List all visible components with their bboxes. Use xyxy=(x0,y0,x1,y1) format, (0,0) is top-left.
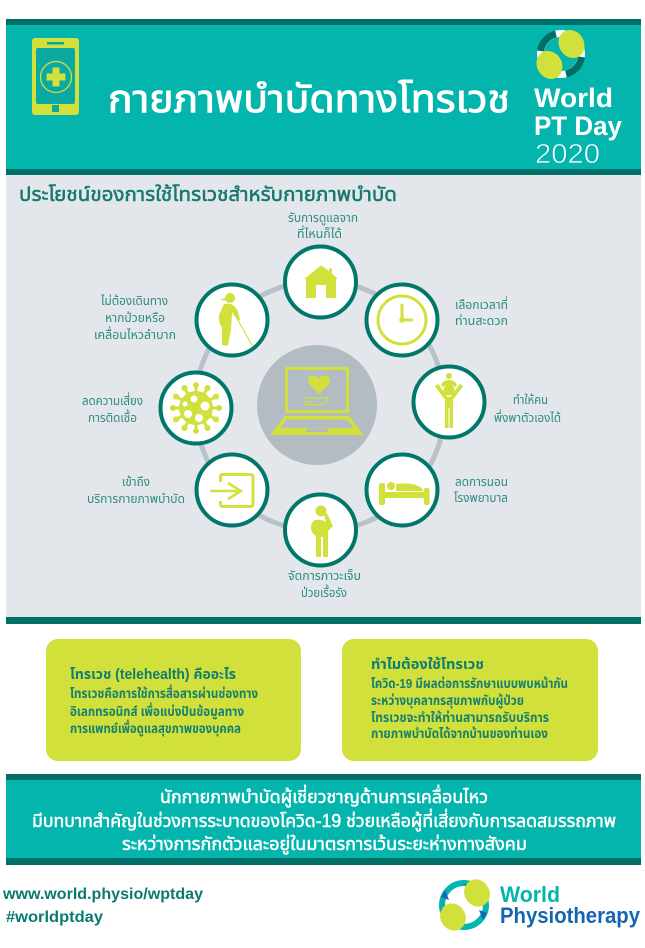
footer links xyxy=(2,886,203,926)
icon: entry arrow xyxy=(210,474,253,506)
World Physiotherapy logo xyxy=(435,875,641,935)
label: ลดการนอน xyxy=(455,475,508,489)
label xyxy=(455,296,508,328)
banner text: ระหว่างการกักตัวและอยู่ในมาตรการเว้นระยะห่างทางสังคม xyxy=(122,834,527,856)
World PT Day logo: World xyxy=(534,83,613,113)
World PT Day logo: 2020 xyxy=(535,138,600,169)
node: reduce hospital stay xyxy=(366,454,508,526)
label xyxy=(288,211,358,241)
info box: what is telehealth xyxy=(46,639,301,761)
label xyxy=(94,294,176,342)
box text: การแพทย์เพื่อดูแลสุขภาพของบุคคล xyxy=(70,719,241,737)
label: ทำให้คน xyxy=(513,393,548,407)
node: reduce infection risk xyxy=(82,372,232,444)
node: care from anywhere xyxy=(285,211,358,318)
label: โรงพยาบาล xyxy=(454,491,508,505)
footer links: www.world.physio/wptday xyxy=(2,886,203,903)
label xyxy=(454,475,508,505)
closing message banner xyxy=(6,774,641,865)
label: พึ่งพาตัวเองได้ xyxy=(494,409,561,425)
box text: ระหว่างบุคลากรสุขภาพกับผู้ป่วย xyxy=(371,693,524,709)
label: เคลื่อนไหวลำบาก xyxy=(94,326,176,342)
icon: person in bed xyxy=(379,482,430,505)
banner text: นักกายภาพบำบัดผู้เชี่ยวชาญด้านการเคลื่อนไหว xyxy=(160,784,488,809)
icon: person lifting child xyxy=(436,373,462,428)
label: การติดเชื้อ xyxy=(88,409,137,425)
box text: โควิด-19 มีผลต่อการรักษาแบบพบหน้ากัน xyxy=(371,676,568,691)
section heading: ประโยชน์ของการใช้โทรเวชสำหรับกายภาพบำบัด xyxy=(19,183,397,206)
panel: benefits of telehealth xyxy=(6,175,641,624)
header banner xyxy=(6,19,641,175)
label: หากป่วยหรือ xyxy=(105,311,165,325)
label xyxy=(82,392,143,425)
info box: why use telehealth xyxy=(342,639,598,761)
centre circle: laptop with heart xyxy=(257,345,377,465)
ring connector xyxy=(195,281,445,531)
label: จัดการภาวะเจ็บ xyxy=(288,569,361,583)
box text: อิเลกทรอนิกส์ เพื่อแบ่งปันข้อมูลทาง xyxy=(70,702,244,720)
box text: กายภาพบำบัดได้จากบ้านของท่านเอง xyxy=(371,726,548,741)
box heading: ทำไมต้องใช้โทรเวช xyxy=(371,657,484,673)
label xyxy=(87,475,185,506)
icon: house xyxy=(304,266,338,298)
icon: elderly person with cane xyxy=(219,293,252,346)
icon: smartphone with medical cross xyxy=(32,38,79,115)
banner text xyxy=(32,784,616,856)
label: เลือกเวลาที่ xyxy=(455,296,508,312)
banner text: มีบทบาทสำคัญในช่วงการระบาดของโควิด-19 ช่วยเหลือผู้ที่เสี่ยงกับการลดสมรรถภาพ xyxy=(32,808,616,833)
node: choose convenient time xyxy=(366,284,508,356)
box text xyxy=(371,676,568,741)
box text: โทรเวชคือการใช้การสื่อสารผ่านช่องทาง xyxy=(70,684,258,701)
label xyxy=(288,569,361,600)
node: access to physiotherapy xyxy=(87,454,268,526)
label xyxy=(494,393,561,425)
icon: virus xyxy=(170,382,222,434)
label: ป่วยเรื้อรัง xyxy=(301,584,347,600)
box text xyxy=(70,684,258,737)
label: รับการดูแลจาก xyxy=(288,211,358,225)
label: ไม่ต้องเดินทาง xyxy=(100,294,168,308)
World PT Day logo xyxy=(531,25,622,169)
icon: person holding head xyxy=(311,506,333,557)
World Physiotherapy logo: World xyxy=(500,882,560,907)
node: no need to travel xyxy=(94,284,268,356)
node: self reliance xyxy=(414,366,561,438)
World PT Day logo: PT Day xyxy=(534,111,622,141)
box heading: โทรเวช (telehealth) คืออะไร xyxy=(70,667,236,683)
label: ที่ไหนก็ได้ xyxy=(297,225,342,241)
label: ลดความเสี่ยง xyxy=(82,392,143,408)
icon: clock xyxy=(378,296,426,344)
footer links: #worldptday xyxy=(6,909,103,926)
label: บริการกายภาพบำบัด xyxy=(87,492,185,506)
label: ท่านสะดวก xyxy=(455,314,508,328)
label: เข้าถึง xyxy=(122,475,150,489)
node: manage chronic illness xyxy=(285,494,361,600)
box text: โทรเวชจะทำให้ท่านสามารถรับบริการ xyxy=(371,710,549,725)
title: กายภาพบำบัดทางโทรเวช xyxy=(108,79,510,121)
